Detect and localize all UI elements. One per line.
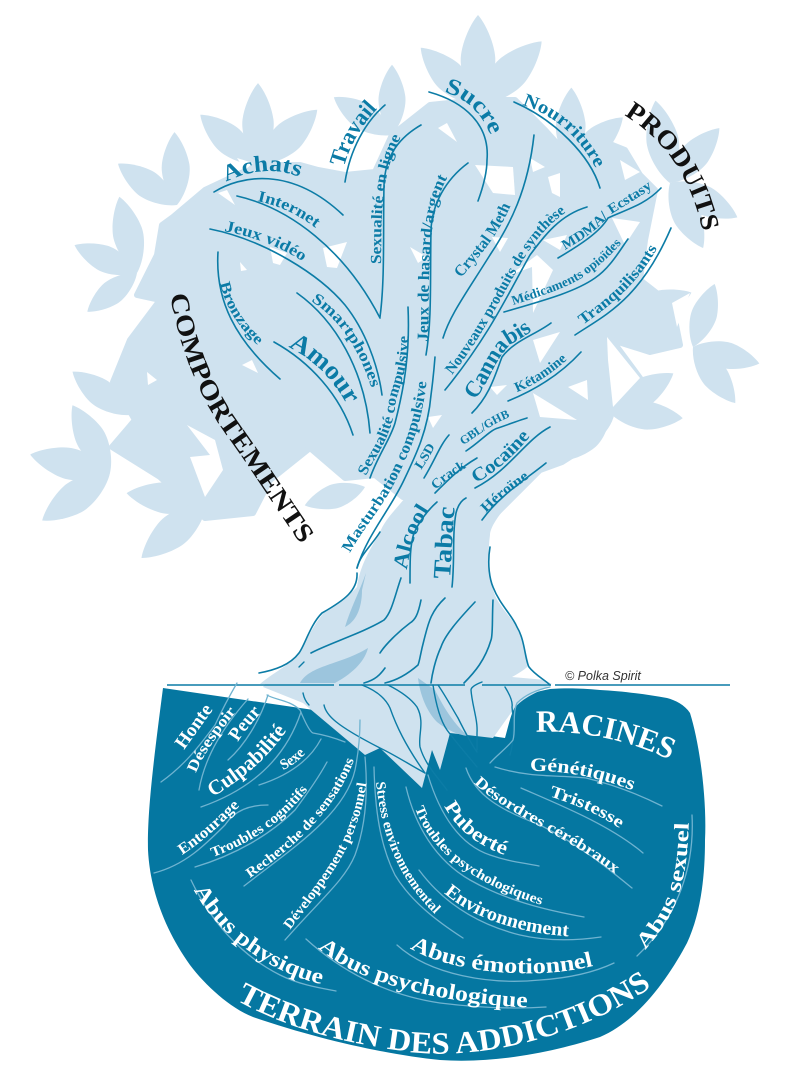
branch: Tabac: Tabac [434,507,455,578]
root: Abus physique: Abus physique [189,880,327,989]
root: Puberté: Puberté [440,797,511,860]
underground terrain [148,688,705,1061]
root: Honte [160,682,238,783]
heading: RACINES: RACINES [536,711,676,758]
root: Culpabilité: Culpabilité [208,722,286,794]
root: Sexe: Sexe [280,750,305,770]
tree canopy foliage [27,15,763,571]
trunk and root lines [259,532,550,790]
root: Recherche de sensations: Recherche de sensations [244,758,354,878]
ground line [167,684,730,686]
branch: Crack: Crack [432,462,466,488]
gaps between the leaves [147,123,690,497]
root: Tristesse: Tristesse [548,782,628,832]
branch: Amour: Amour [288,336,358,402]
branch: Kétamine: Kétamine [513,356,566,392]
branch: Sucre: Sucre [446,80,499,134]
branch: Cocaïne: Cocaïne [472,432,530,480]
branch: Bronzage: Bronzage [220,280,262,344]
branch: Achats: Achats [226,156,302,182]
branch: Masturbation compulsive: Masturbation compulsive [341,382,426,553]
root: Désespoir [186,698,249,791]
branch: Tranquilisants [574,227,672,336]
trunk white highlight [512,662,546,680]
branch: Travail: Travail [330,99,377,164]
branch: Cannabis: Cannabis [466,323,530,397]
branch: Kétamine [507,351,582,402]
branch: Nourriture [513,94,602,189]
root: Peur: Peur [228,706,260,742]
root: Génétiques [495,755,662,806]
root: Troubles cognitifs: Troubles cognitifs [210,786,307,856]
root: Développement personnel: Développement personnel [282,782,366,930]
branch: Héroïne [480,462,547,521]
branch: Jeux vidéo: Jeux vidéo [224,221,305,260]
branch: Nouveaux produits de synthèse: Nouveaux produits de synthèse [444,208,566,375]
branch: Internet [236,191,381,319]
branch: GBL/GHB: GBL/GHB [460,410,509,444]
branch: Amour [273,336,358,436]
branch: Cannabis [466,322,552,414]
branch: Sexualité en ligne: Sexualité en ligne [370,135,400,264]
branch: Travail [330,99,386,183]
branch: Alcool [394,501,438,584]
root: Puberté [427,774,540,867]
branch: Sexualité en ligne [370,124,422,318]
heading: COMPORTEMENTS: COMPORTEMENTS [172,294,314,542]
root: Tristesse [521,782,643,853]
root: Génétiques: Génétiques [530,755,638,795]
branch: Crystal Meth: Crystal Meth [455,204,510,276]
root: Abus émotionnel: Abus émotionnel [407,931,595,978]
branch: Smartphones: Smartphones [312,294,378,387]
branch: Nourriture: Nourriture [522,94,602,168]
branch: Jeux de hasard/argent [418,162,469,356]
root: Environnement: Environnement [441,880,570,941]
root: Troubles psychologiques: Troubles psychologiques [411,804,545,909]
branch: Crack [432,457,478,494]
branch: Tabac [434,497,467,588]
branch: Médicaments opioïdes: Médicaments opioïdes [510,240,620,305]
credit: Polka Spirit: © Polka Spirit [565,669,641,683]
root: Stress environnemental [373,766,464,939]
branch: Sexualité compulsive: Sexualité compulsive [358,336,408,475]
heading: PRODUITS: PRODUITS [624,101,718,230]
root: Environnement [419,870,601,941]
root: Désordres cérébraux: Désordres cérébraux [471,773,623,877]
heading: TERRAIN DES ADDICTIONS: TERRAIN DES ADDICTIONS [240,972,648,1054]
trunk shaded patches [300,573,368,683]
root: Entourage: Entourage [176,802,239,855]
root: Désespoir: Désespoir [186,707,235,773]
branch: Internet: Internet [258,191,320,228]
tree trunk and root base [260,440,552,684]
branch: Jeux de hasard/argent: Jeux de hasard/argent [418,174,447,342]
branch: Achats [213,156,344,216]
branch: LSD: LSD [414,444,434,470]
branch: Alcool: Alcool [394,503,428,570]
root intrusion into terrain [263,684,550,788]
root: Troubles psychologiques [405,786,585,918]
branch: LSD [414,434,450,479]
root: Stress environnemental: Stress environnemental [372,781,443,917]
root: Entourage [153,802,269,874]
branch: Tranquilisants: Tranquilisants [577,246,656,324]
branch: Héroïne: Héroïne [480,474,528,513]
root: Sexe [258,738,322,786]
branch: Jeux vidéo [209,221,383,396]
branch: GBL/GHB [460,410,528,452]
branch: Sucre [428,80,499,202]
branch: MDMA/Ecstasy: MDMA/ Ecstasy [560,182,650,250]
branch: Crystal Meth [442,134,535,339]
root: Troubles cognitifs [194,761,328,868]
root: Abus psychologique: Abus psychologique [315,932,529,1012]
branch: Smartphones [296,292,378,434]
root shaded patch [418,678,468,736]
root: Peur [227,694,269,761]
root: Honte: Honte [174,706,212,750]
root: Abus sexuel: Abus sexuel [630,822,694,953]
branch: Bronzage [216,251,281,380]
